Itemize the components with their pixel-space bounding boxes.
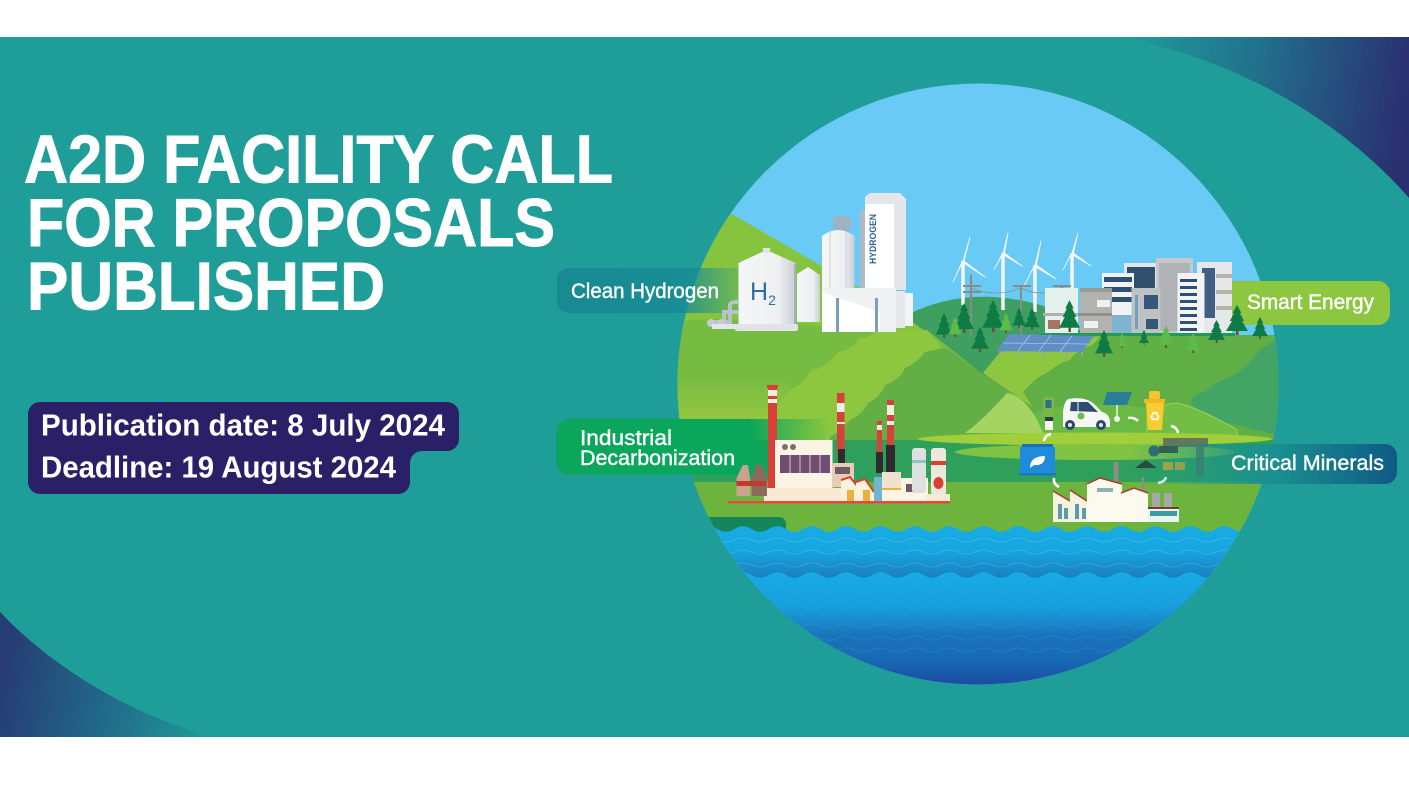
- battery: [1019, 444, 1056, 476]
- electric car: [1063, 398, 1110, 430]
- critical minerals cycle: [1019, 391, 1208, 522]
- recycling bin: [1144, 391, 1165, 430]
- H2 mark: H: [750, 278, 768, 306]
- label: Critical Minerals: [1130, 444, 1397, 484]
- base building: [822, 288, 896, 332]
- mine equipment: [1135, 438, 1208, 476]
- hills and ground: [670, 214, 1290, 538]
- label: Industrial Decarbonization: Decarbonization: [580, 447, 735, 470]
- label: Smart Energy: Smart Energy: [1247, 291, 1374, 314]
- silo: [833, 216, 851, 231]
- utility poles: [963, 275, 1071, 335]
- H2 mark: 2: [768, 292, 776, 308]
- buildings: [1040, 258, 1235, 336]
- title: [24, 122, 613, 324]
- corner swoosh: bottom left: [0, 612, 215, 737]
- dates callout: [28, 402, 459, 494]
- H2 tank: [738, 252, 796, 327]
- corner swoosh: top right: [1120, 37, 1409, 198]
- solar panel: [1103, 392, 1132, 422]
- title: FOR PROPOSALS: [27, 185, 555, 261]
- label: Clean Hydrogen: Clean Hydrogen: [571, 280, 719, 303]
- rear tank: [797, 267, 820, 322]
- industrial plant: [728, 385, 950, 504]
- factory: [1053, 462, 1179, 522]
- pipes: [710, 302, 738, 322]
- solar array: [996, 334, 1094, 359]
- boat dock: [708, 517, 786, 532]
- sky: [670, 80, 1290, 690]
- water: [714, 526, 1240, 684]
- label: Clean Hydrogen: [557, 268, 745, 313]
- circular landscape: [666, 80, 1290, 690]
- dates callout: Publication date: 8 July 2024: [41, 408, 446, 442]
- wind turbines: [953, 233, 1091, 312]
- title: A2D FACILITY CALL: [24, 122, 613, 198]
- label: Industrial Decarbonization: [556, 419, 830, 475]
- title: PUBLISHED: [27, 248, 385, 324]
- recycling bin: ♻: [1149, 409, 1161, 424]
- tower: [860, 210, 865, 290]
- label: Smart Energy: [1232, 281, 1390, 325]
- pine trees: [936, 300, 1268, 357]
- cycle arrows: [1044, 418, 1178, 487]
- label: Industrial Decarbonization: Industrial: [580, 427, 672, 450]
- dates callout: Deadline: 19 August 2024: [41, 450, 397, 484]
- charging station: [1043, 397, 1054, 430]
- label: Critical Minerals: Critical Minerals: [1231, 452, 1384, 475]
- tower lettering: HYDROGEN: [868, 214, 878, 264]
- hydrogen plant: [707, 193, 913, 332]
